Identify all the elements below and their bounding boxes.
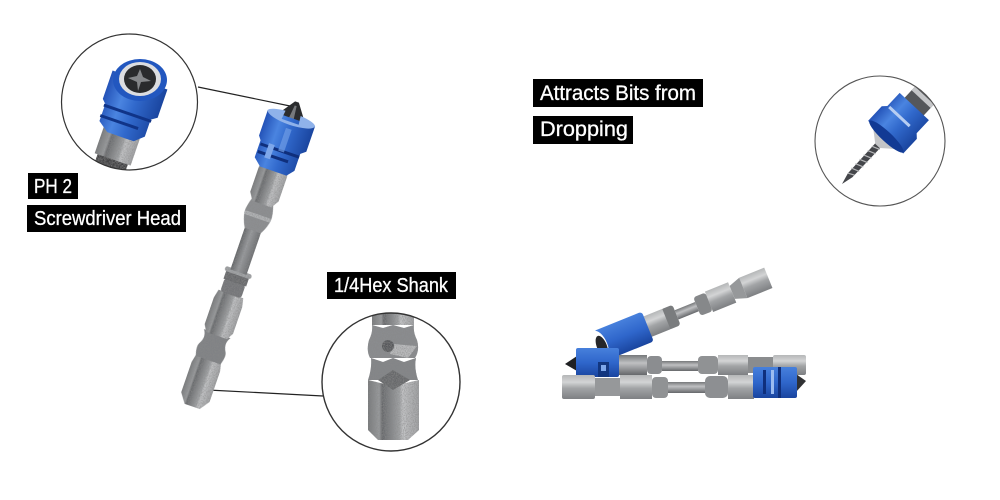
- label: 1/4Hex Shank: 1/4Hex Shank: [334, 275, 449, 297]
- metal body: [178, 161, 289, 411]
- label: Dropping: Dropping: [540, 118, 628, 141]
- leader line: shank: [208, 390, 323, 396]
- hex top: [904, 86, 934, 116]
- main screwdriver bit: [169, 94, 321, 415]
- lower horizontal bit: [562, 367, 806, 399]
- shaft collar lower: [220, 278, 246, 298]
- label: Attracts Bits from: Attracts Bits from: [540, 82, 696, 105]
- label: PH 2: PH 2: [34, 176, 72, 198]
- leader line: head: [198, 87, 290, 106]
- grooved notch lower: [194, 329, 231, 365]
- screw: [842, 143, 880, 184]
- hex section middle: [202, 289, 245, 340]
- shaft collar upper: [239, 197, 276, 235]
- tilted bit: [586, 263, 774, 364]
- hex section lower: [178, 353, 223, 411]
- hex section upper: [248, 161, 289, 209]
- shaft: [230, 226, 261, 275]
- infographic canvas: [27, 33, 946, 452]
- upper horizontal bit: [565, 348, 806, 377]
- circle: hex shank detail: [322, 305, 460, 451]
- screw head: [874, 130, 894, 149]
- label: Screwdriver Head: Screwdriver Head: [34, 208, 181, 230]
- circle: screwdriver head detail: [62, 34, 198, 188]
- circle: bit holding a screw: [815, 75, 946, 206]
- phillips tip: [278, 98, 308, 129]
- blue magnetic collar: [250, 105, 317, 179]
- blue collar: [868, 90, 932, 154]
- group photo of three bits: [562, 263, 806, 399]
